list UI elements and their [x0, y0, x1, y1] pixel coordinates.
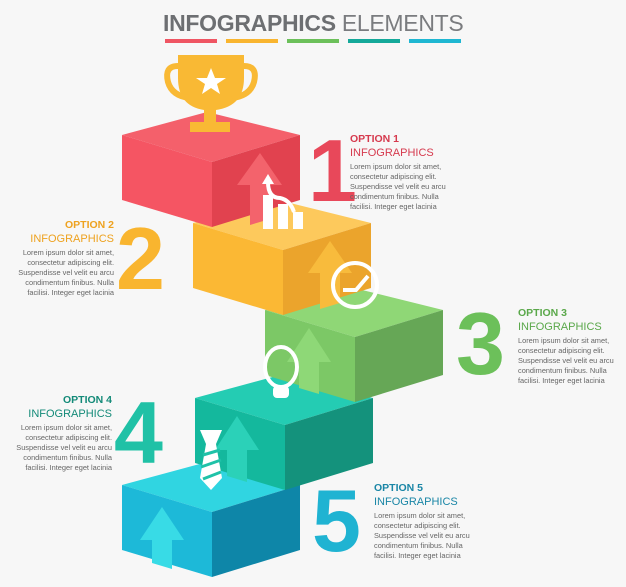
text: option 2: Suspendisse vel velit eu arcu	[18, 268, 114, 277]
text: option 3: Lorem ipsum dolor sit amet,	[518, 336, 609, 345]
box 4 teal	[195, 375, 373, 490]
text: option 5: INFOGRAPHICS	[374, 496, 458, 508]
text: option 3: consectetur adipiscing elit.	[518, 346, 605, 355]
text: option 5: Suspendisse vel velit eu arcu	[374, 531, 470, 540]
text: option 3	[518, 307, 614, 385]
text: option 4: INFOGRAPHICS	[28, 408, 112, 420]
text: option 1: consectetur adipiscing elit.	[350, 172, 437, 181]
numbers: 2	[116, 209, 165, 308]
text: option 5: consectetur adipiscing elit.	[374, 521, 461, 530]
box 2 yellow	[193, 200, 371, 315]
text: option 2	[18, 219, 114, 297]
icon: clock	[333, 263, 377, 307]
text: option 5: facilisi. Integer eget lacinia	[374, 551, 461, 560]
numbers: 1	[308, 121, 357, 220]
icon: lightbulb	[265, 347, 297, 398]
text: option 2: consectetur adipiscing elit.	[27, 258, 114, 267]
text: option 2: INFOGRAPHICS	[30, 233, 114, 245]
text: option 1: condimentum finibus. Nulla	[350, 192, 439, 201]
text: option 4	[16, 394, 112, 472]
text: option 1: INFOGRAPHICS	[350, 147, 434, 159]
numbers	[114, 121, 505, 570]
text: option 3: facilisi. Integer eget lacinia	[518, 376, 605, 385]
text: option 5: condimentum finibus. Nulla	[374, 541, 463, 550]
numbers: 3	[456, 294, 505, 393]
text: option 2: facilisi. Integer eget lacinia	[27, 288, 114, 297]
text: option 4: condimentum finibus. Nulla	[23, 453, 112, 462]
text: option 1: facilisi. Integer eget lacinia	[350, 202, 437, 211]
text: option 1: Suspendisse vel velit eu arcu	[350, 182, 446, 191]
text: option 4: facilisi. Integer eget lacinia	[25, 463, 112, 472]
text: option 4: Suspendisse vel velit eu arcu	[16, 443, 112, 452]
text: option 3: Suspendisse vel velit eu arcu	[518, 356, 614, 365]
icon: growth chart	[262, 174, 303, 229]
box 5 cyan	[122, 462, 300, 577]
text: option 4: OPTION 4	[63, 394, 112, 406]
text: option 4: Lorem ipsum dolor sit amet,	[21, 423, 112, 432]
text: option 3: OPTION 3	[518, 307, 567, 319]
icon: tie	[200, 430, 222, 490]
text: option 5	[374, 482, 470, 560]
text: option 1: Lorem ipsum dolor sit amet,	[350, 162, 441, 171]
text: option 1: OPTION 1	[350, 133, 399, 145]
icon: trophy	[167, 55, 255, 132]
text: option 2: OPTION 2	[65, 219, 114, 231]
numbers: 5	[312, 471, 361, 570]
text: option 2: condimentum finibus. Nulla	[25, 278, 114, 287]
text: option 4: consectetur adipiscing elit.	[25, 433, 112, 442]
box 3 green	[265, 287, 443, 402]
text: option 3: INFOGRAPHICS	[518, 321, 602, 333]
numbers: 4	[114, 383, 163, 482]
text: option 1	[350, 133, 446, 211]
text: option 5: Lorem ipsum dolor sit amet,	[374, 511, 465, 520]
text: option 5: OPTION 5	[374, 482, 423, 494]
box 1 red	[122, 112, 300, 227]
text: option 3: condimentum finibus. Nulla	[518, 366, 607, 375]
text: option 2: Lorem ipsum dolor sit amet,	[23, 248, 114, 257]
title: INFOGRAPHICS ELEMENTS	[163, 10, 463, 36]
